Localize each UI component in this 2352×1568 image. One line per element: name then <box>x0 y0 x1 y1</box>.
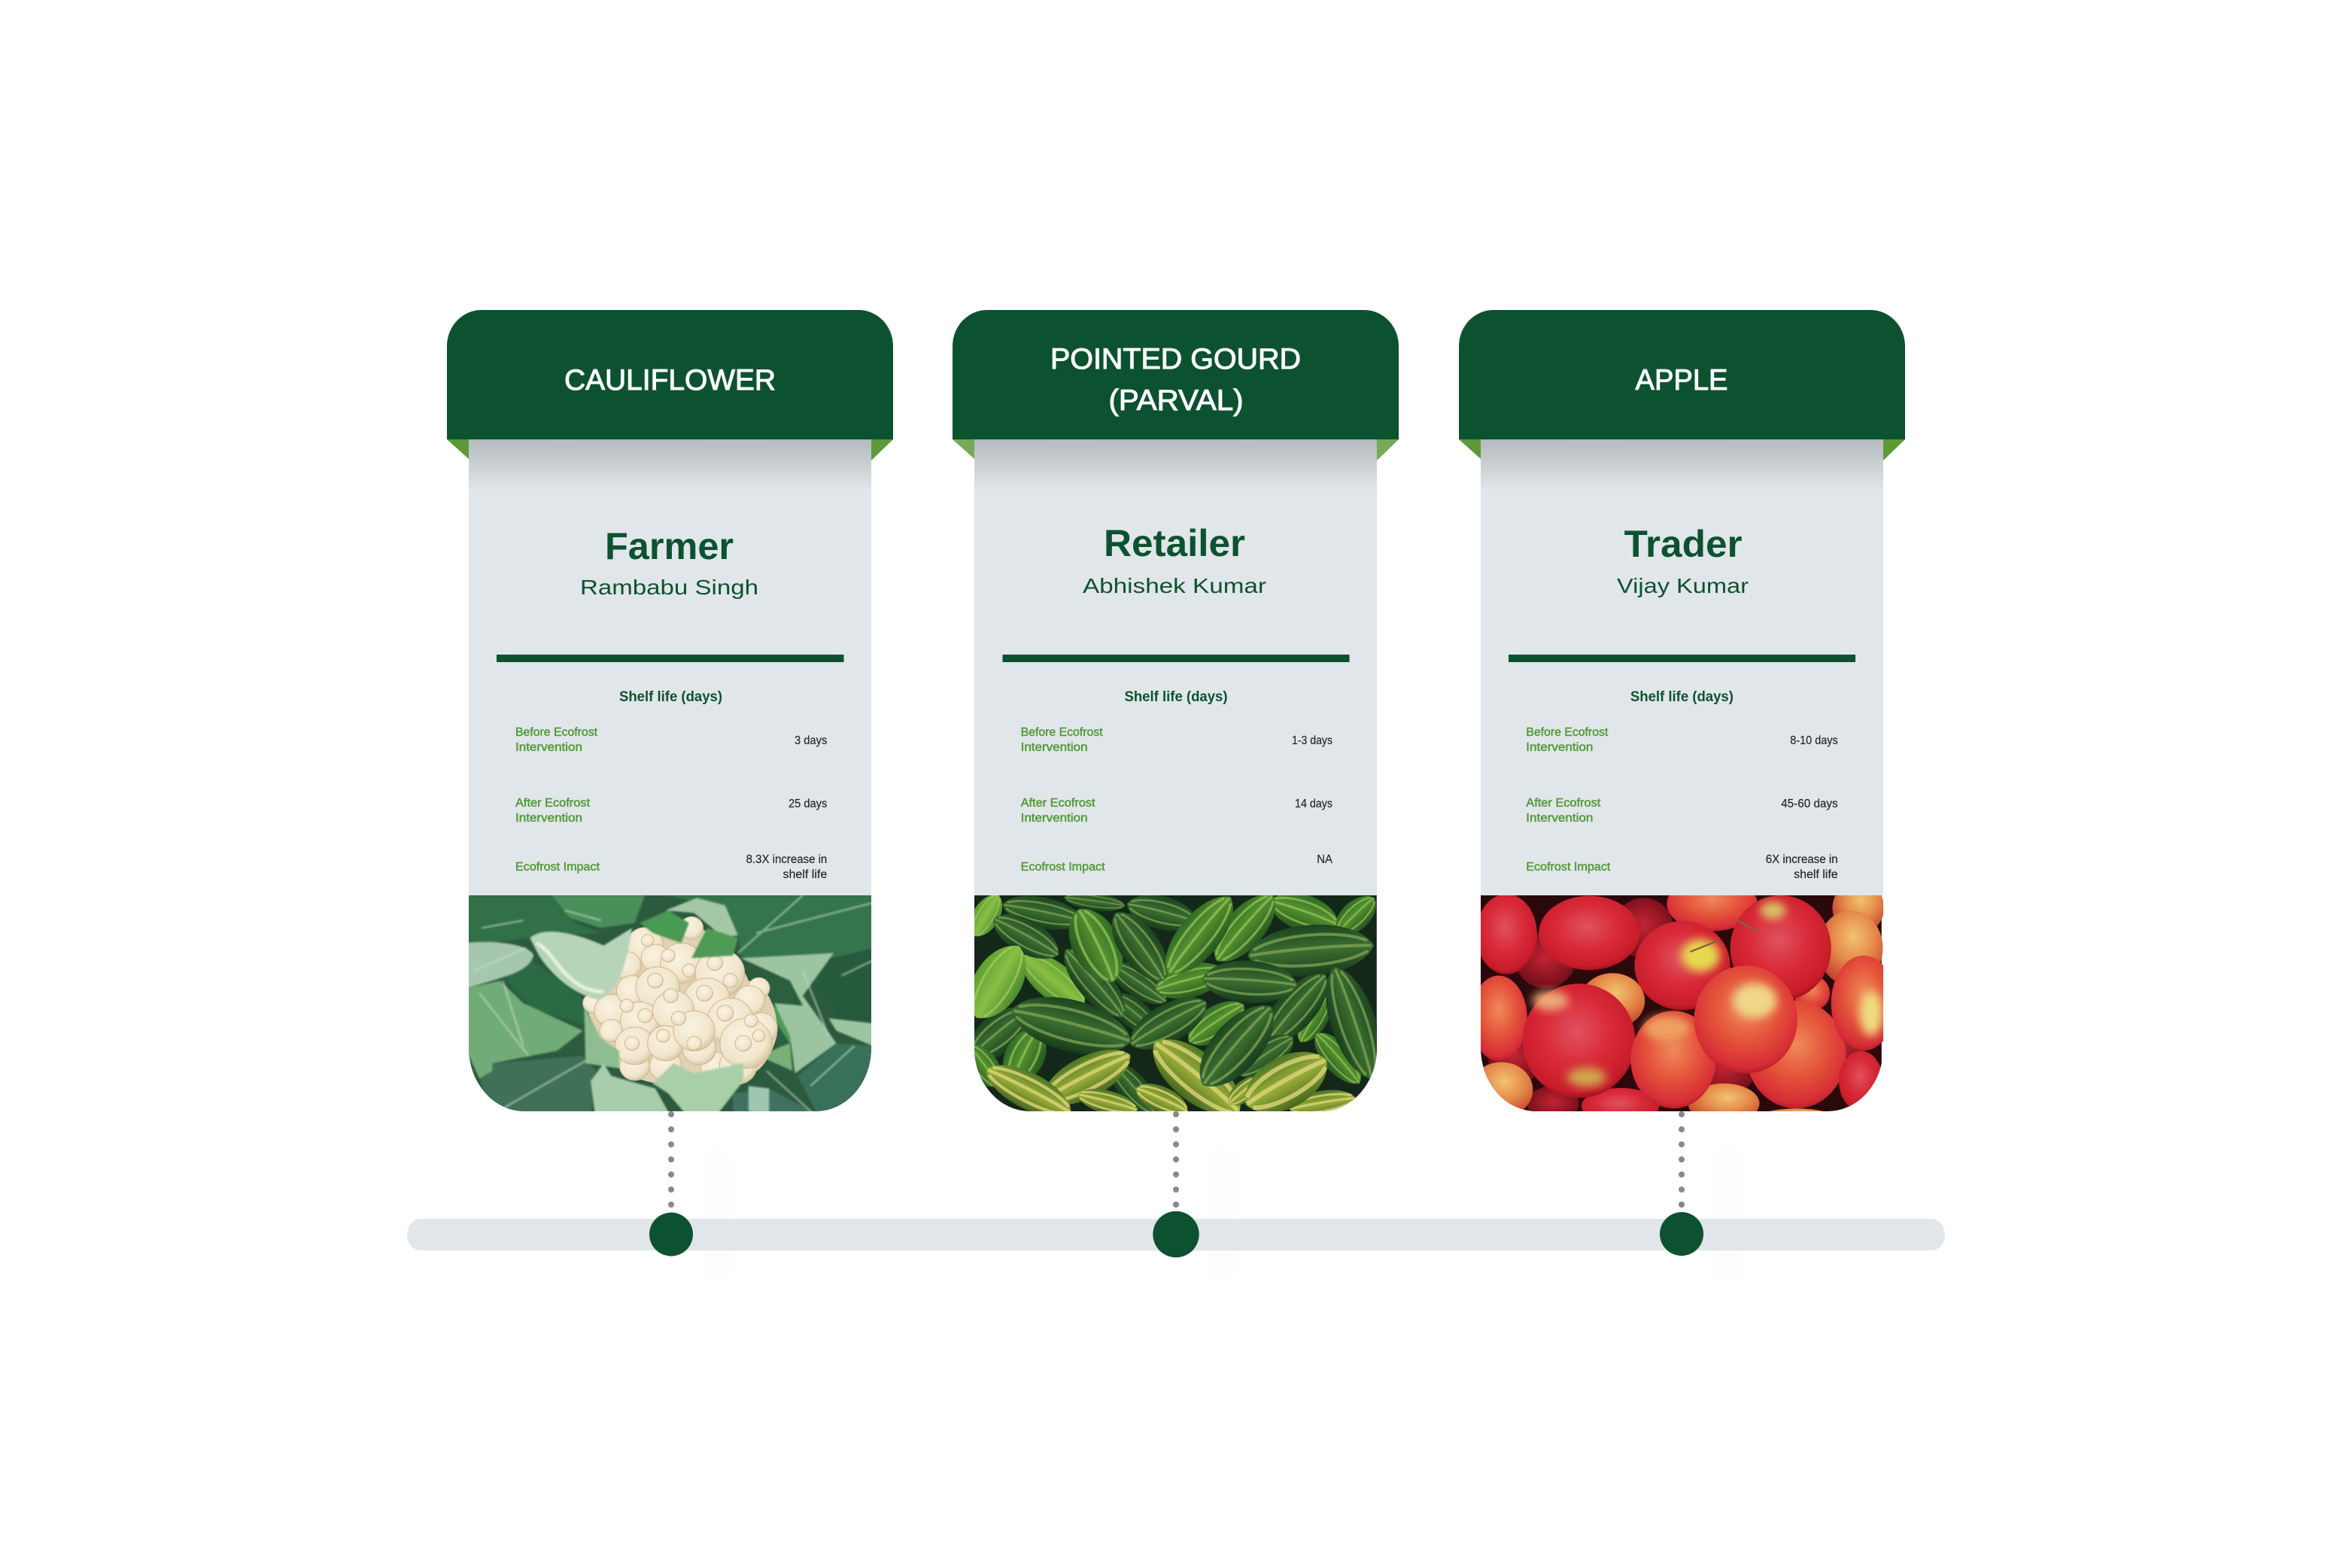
shelf life table: Ecofrost Impact <box>1526 861 1611 874</box>
shelf life table: 25 days <box>789 798 828 810</box>
header title: CAULIFLOWER <box>564 364 776 397</box>
role: Trader <box>1624 523 1743 565</box>
card: pointed gourd <box>953 310 1399 1130</box>
header shadow gradient <box>1481 439 1883 491</box>
header shadow gradient <box>469 439 871 491</box>
role: Farmer <box>605 525 734 567</box>
shelf life table: NA <box>1317 853 1333 866</box>
faint shadows near timeline <box>703 1149 1743 1281</box>
shelf life table: Intervention <box>515 812 582 825</box>
card body <box>1481 439 1883 895</box>
header shadow gradient <box>974 439 1377 491</box>
shelf life table: 3 days <box>795 734 828 747</box>
connector dots: pointed gourd <box>1173 1111 1179 1208</box>
person name: Vijay Kumar <box>1617 574 1749 597</box>
shelf life table <box>1526 726 1838 881</box>
shelf life heading: Shelf life (days) <box>1124 689 1228 705</box>
header title: (PARVAL) <box>1109 384 1243 417</box>
header band <box>1459 310 1905 439</box>
shelf life table: Intervention <box>1526 741 1593 754</box>
card: cauliflower <box>447 310 893 1121</box>
shelf life table: Intervention <box>1021 741 1088 754</box>
shelf life table: shelf life <box>1794 868 1838 881</box>
timeline marker: cauliflower <box>649 1213 693 1257</box>
divider bar <box>1509 655 1855 662</box>
shelf life table: 8-10 days <box>1790 734 1838 747</box>
connector dots: cauliflower <box>668 1111 674 1208</box>
connector dots: apple <box>1679 1111 1685 1208</box>
cauliflower head <box>583 916 777 1085</box>
photo: apples <box>1481 895 1883 1111</box>
shelf life heading: Shelf life (days) <box>1630 689 1734 705</box>
shelf life table: Intervention <box>1021 812 1088 825</box>
divider bar <box>1002 655 1350 662</box>
shelf life table: Intervention <box>515 741 582 754</box>
shelf life table: After Ecofrost <box>515 797 591 810</box>
photo: pointed gourds <box>974 895 1377 1111</box>
shelf life table <box>1021 726 1333 874</box>
shelf life table: Before Ecofrost <box>1526 726 1609 739</box>
photo: cauliflower <box>466 895 873 1121</box>
card body <box>469 439 871 895</box>
timeline marker: apple <box>1660 1212 1703 1256</box>
shelf life table: After Ecofrost <box>1526 797 1601 810</box>
timeline track <box>407 1219 1945 1250</box>
shelf life table: 45-60 days <box>1781 798 1838 810</box>
shelf life table: 8.3X increase in <box>746 853 827 866</box>
shelf life table: shelf life <box>782 868 827 881</box>
shelf life table: After Ecofrost <box>1021 797 1095 810</box>
fold corners <box>447 439 893 460</box>
shelf life table <box>515 726 828 881</box>
shelf life table: Ecofrost Impact <box>1021 861 1105 874</box>
header title: APPLE <box>1636 364 1728 397</box>
shelf life table: 6X increase in <box>1766 853 1838 866</box>
role: Retailer <box>1104 522 1245 564</box>
shelf life table: 14 days <box>1295 798 1332 810</box>
card: apple <box>1459 310 1905 1124</box>
shelf life table: Intervention <box>1526 812 1593 825</box>
header band <box>953 310 1399 439</box>
timeline marker: pointed gourd <box>1153 1211 1199 1257</box>
shelf life table: Before Ecofrost <box>515 726 598 739</box>
card body <box>974 439 1377 895</box>
shelf life table: 1-3 days <box>1292 734 1332 747</box>
fold corners <box>953 439 1399 460</box>
divider bar <box>497 655 844 662</box>
person name: Rambabu Singh <box>580 576 758 599</box>
header title: POINTED GOURD <box>1050 343 1301 375</box>
shelf life table: Before Ecofrost <box>1021 726 1103 739</box>
shelf life table: Ecofrost Impact <box>515 861 600 874</box>
header band <box>447 310 893 439</box>
person name: Abhishek Kumar <box>1083 574 1266 597</box>
header title <box>1050 343 1301 417</box>
fold corners <box>1459 439 1905 460</box>
shelf life heading: Shelf life (days) <box>619 689 722 705</box>
